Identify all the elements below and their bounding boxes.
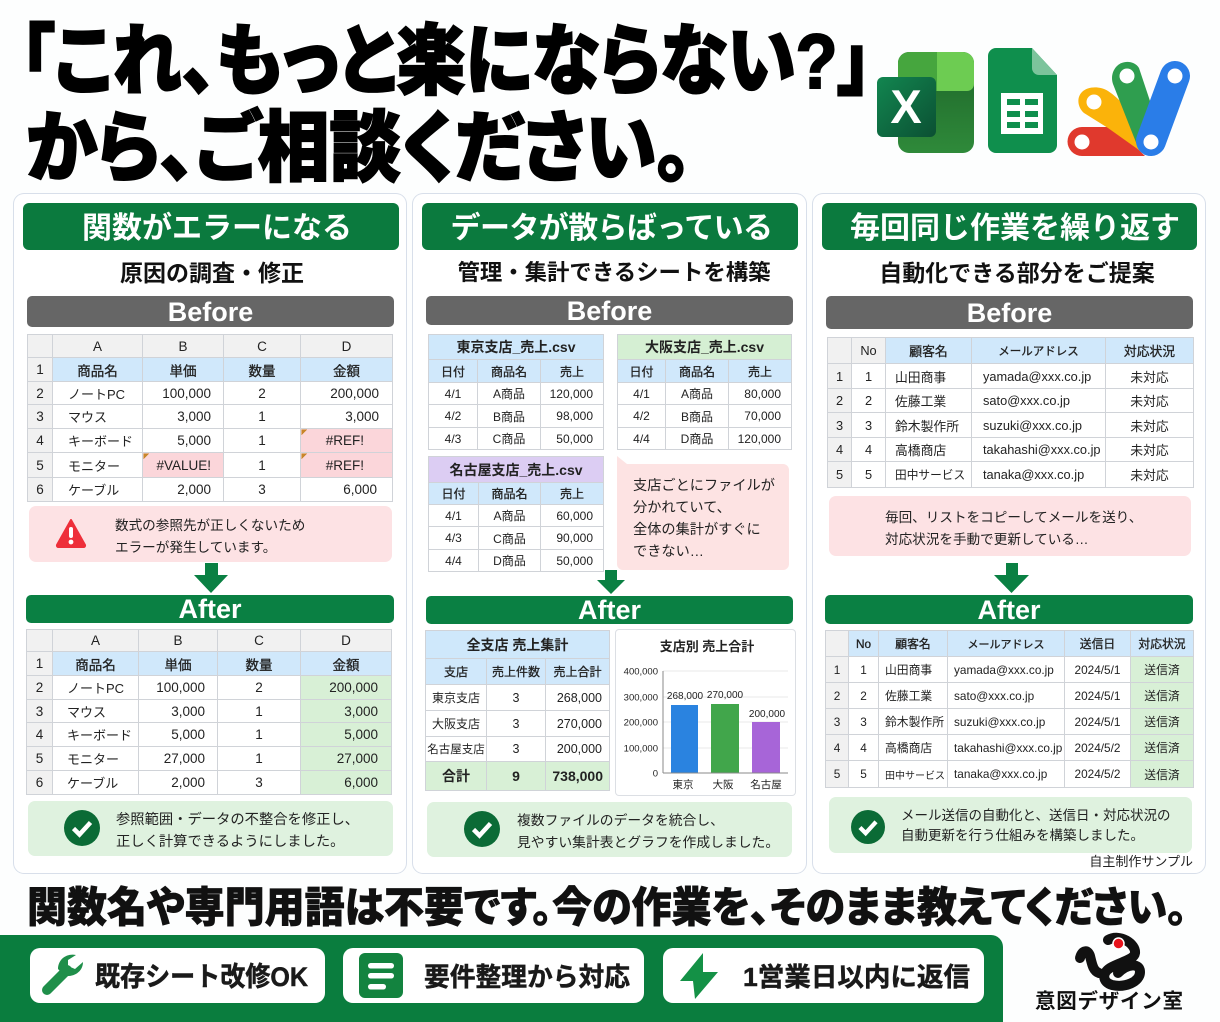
table: 名古屋支店 csv: 60,000	[556, 508, 593, 522]
before spreadsheet table: ケーブル	[68, 483, 119, 498]
after customer table: 2024/5/2	[1075, 740, 1120, 754]
result text	[517, 813, 779, 850]
table: 大阪支店 csv: 日付	[629, 364, 654, 378]
bubble text: 分かれていて、	[633, 500, 731, 516]
before label: Before	[967, 298, 1052, 328]
after spreadsheet table: B	[173, 633, 182, 648]
before customer table: 佐藤工業	[895, 394, 946, 409]
after spreadsheet table: 27,000	[337, 751, 378, 766]
icon: Excel: X	[890, 80, 922, 133]
after spreadsheet table: 数量	[246, 658, 272, 672]
table: 名古屋支店 csv: D商品	[493, 554, 526, 568]
after spreadsheet table: 2	[255, 680, 263, 695]
after spreadsheet table: キーボード	[67, 728, 132, 743]
icon: wrench	[42, 954, 83, 995]
summary table: 売上件数	[492, 665, 540, 679]
before customer table: 鈴木製作所	[895, 418, 959, 434]
table: 名古屋支店 csv: 名古屋支店_売上.csv	[449, 462, 583, 478]
before customer table: 2	[865, 393, 872, 408]
pill: 1営業日以内に返信	[663, 948, 984, 1003]
bar chart: 支店別 売上合計: 268,000	[667, 691, 704, 702]
arrow: before to after	[597, 570, 625, 594]
summary table: 東京支店	[432, 691, 480, 705]
before spreadsheet table: 6,000	[343, 482, 377, 497]
result text: 見やすい集計表とグラフを作成しました。	[517, 835, 779, 850]
before spreadsheet table: 3,000	[345, 409, 379, 424]
table: 東京支店 csv: 4/3	[445, 432, 461, 446]
after label	[26, 595, 394, 623]
before spreadsheet table: 2,000	[177, 482, 211, 497]
icon: check mark	[464, 811, 500, 847]
summary table: 3	[513, 742, 519, 756]
bar chart: 支店別 売上合計: 東京	[672, 778, 694, 791]
before customer table: 対応状況	[1124, 344, 1175, 359]
before customer table: 未対応	[1130, 443, 1169, 458]
after customer table: 送信済	[1144, 715, 1180, 729]
table: 名古屋支店 csv	[428, 456, 604, 572]
result text: 参照範囲・データの不整合を修正し、	[116, 812, 359, 828]
before customer table: tanaka@xxx.co.jp	[983, 467, 1084, 482]
before customer table: 1	[865, 368, 872, 384]
result text: 正しく計算できるようにしました。	[116, 834, 344, 850]
bar chart: 支店別 売上合計: 0	[653, 768, 658, 780]
callout: result	[829, 797, 1192, 853]
before customer table: yamada@xxx.co.jp	[983, 368, 1091, 384]
before customer table: 4	[836, 442, 843, 457]
callout: result	[427, 802, 792, 857]
summary table	[425, 630, 610, 791]
icon: Excel	[877, 52, 974, 153]
error explanation text	[115, 518, 305, 555]
before label: Before	[567, 296, 652, 326]
after customer table: tanaka@xxx.co.jp	[954, 767, 1047, 781]
table: 東京支店 csv: 東京支店_売上.csv	[456, 339, 576, 355]
table: 大阪支店 csv: 80,000	[744, 386, 781, 400]
after customer table: sato@xxx.co.jp	[954, 688, 1034, 702]
sample note: 自主制作サンプル	[1089, 854, 1193, 869]
table: 大阪支店 csv: D商品	[681, 432, 713, 446]
summary table: 9	[512, 768, 520, 784]
after spreadsheet table: D	[341, 633, 351, 648]
after customer table: 1	[860, 662, 867, 676]
error explanation text: 数式の参照先が正しくないため	[115, 518, 305, 533]
before customer table: 未対応	[1130, 468, 1169, 483]
after customer table: 5	[860, 767, 867, 781]
summary table: 268,000	[557, 690, 602, 704]
after label: After	[178, 594, 242, 624]
after spreadsheet table: 27,000	[164, 751, 205, 766]
table: 名古屋支店 csv: 50,000	[556, 554, 593, 568]
after customer table	[825, 630, 1194, 788]
before spreadsheet table: 1	[258, 433, 266, 448]
before spreadsheet table: 金額	[333, 364, 360, 378]
before customer table	[827, 337, 1194, 488]
before spreadsheet table: 3	[36, 409, 44, 424]
panel heading	[23, 203, 399, 250]
before spreadsheet table: #REF!	[326, 433, 364, 448]
before spreadsheet table: C	[257, 338, 267, 354]
before customer table: No	[860, 343, 877, 358]
before spreadsheet table: 数量	[248, 364, 276, 378]
table: 大阪支店 csv: 商品名	[679, 364, 715, 378]
table: 東京支店 csv: 売上	[560, 364, 584, 378]
pill: 既存シート改修OK	[30, 948, 325, 1003]
bubble text: 支店ごとにファイルが	[633, 478, 775, 494]
table: 大阪支店 csv: A商品	[681, 387, 713, 401]
table: 大阪支店 csv: 4/1	[633, 386, 650, 400]
bar chart: 支店別 売上合計: 支店別 売上合計	[660, 639, 754, 654]
title	[20, 19, 872, 188]
before spreadsheet table: 4	[36, 433, 44, 448]
result text	[901, 808, 1170, 843]
table: 東京支店 csv: 50,000	[556, 432, 593, 446]
table: 大阪支店 csv: 120,000	[738, 432, 781, 446]
summary table: 合計	[442, 768, 470, 784]
before spreadsheet table: 1	[36, 362, 44, 377]
bar chart: 支店別 売上合計: 300,000	[624, 692, 658, 704]
before spreadsheet table: ノートPC	[68, 386, 125, 402]
summary table: 名古屋支店	[427, 744, 485, 756]
summary table: 200,000	[557, 742, 602, 756]
after spreadsheet table: 5,000	[171, 727, 205, 742]
before spreadsheet table: 5	[36, 458, 44, 472]
after customer table: 2024/5/1	[1075, 688, 1120, 702]
table: 東京支店 csv: 120,000	[550, 386, 593, 400]
after spreadsheet table: 単価	[164, 658, 192, 672]
after customer table: 送信済	[1144, 689, 1180, 703]
table: 東京支店 csv: 4/2	[445, 409, 461, 423]
result text	[116, 812, 359, 850]
table: 大阪支店 csv: 4/2	[633, 409, 650, 423]
after spreadsheet table: 6,000	[344, 775, 378, 790]
before spreadsheet table: キーボード	[68, 434, 133, 449]
table: 東京支店 csv: C商品	[493, 432, 525, 446]
bubble text: できない…	[633, 544, 704, 560]
after label: After	[977, 595, 1040, 625]
icon: check mark	[851, 810, 885, 844]
table: 東京支店 csv: A商品	[493, 387, 525, 401]
after spreadsheet table: 2,000	[171, 775, 205, 790]
before spreadsheet table: B	[178, 338, 188, 354]
service subtitle: 原因の調査・修正	[120, 260, 304, 286]
after customer table: 対応状況	[1138, 637, 1186, 651]
after label	[426, 596, 793, 624]
callout: error cause	[29, 506, 392, 562]
after customer table: 5	[834, 767, 840, 781]
table: 大阪支店 csv: 70,000	[744, 409, 781, 423]
pill: 要件整理から対応	[343, 948, 644, 1003]
result text: メール送信の自動化と、送信日・対応状況の	[901, 808, 1170, 823]
table: 東京支店 csv: 日付	[441, 364, 465, 378]
after spreadsheet table: 3,000	[344, 704, 378, 718]
after spreadsheet table: 4	[36, 727, 43, 742]
table: 東京支店 csv: 4/1	[445, 386, 461, 400]
table: 東京支店 csv: B商品	[493, 410, 525, 424]
before spreadsheet table: 2	[36, 386, 44, 400]
table: 名古屋支店 csv: 90,000	[556, 531, 593, 545]
after customer table: メールアドレス	[968, 638, 1044, 650]
before customer table: 高橋商店	[895, 443, 946, 458]
before spreadsheet table	[27, 334, 393, 502]
error explanation text: エラーが発生しています。	[115, 540, 276, 555]
after customer table: takahashi@xxx.co.jp	[954, 740, 1062, 754]
table: 大阪支店 csv	[617, 334, 792, 450]
after spreadsheet table: 1	[255, 751, 263, 766]
after spreadsheet table: 100,000	[156, 680, 205, 695]
before customer table: 未対応	[1130, 370, 1169, 384]
service subtitle: 自動化できる部分をご提案	[879, 260, 1155, 286]
before spreadsheet table: 3	[258, 482, 266, 497]
before customer table: 未対応	[1130, 394, 1169, 409]
after spreadsheet table: モニター	[67, 752, 119, 767]
before spreadsheet table: D	[342, 338, 351, 354]
table: 東京支店 csv: 商品名	[491, 364, 527, 378]
before spreadsheet table: #VALUE!	[156, 458, 211, 472]
before spreadsheet table: A	[93, 338, 102, 354]
before spreadsheet table: 1	[258, 409, 266, 424]
bar chart: 支店別 売上合計: 200,000	[624, 718, 658, 728]
before spreadsheet table: 商品名	[77, 364, 118, 378]
after customer table: 2024/5/1	[1075, 662, 1120, 676]
after spreadsheet table: 5	[36, 751, 43, 766]
before customer table: 4	[865, 442, 872, 457]
table: 名古屋支店 csv: 4/4	[445, 554, 462, 568]
panel heading	[422, 203, 798, 250]
panel heading: 毎回同じ作業を繰り返す	[850, 212, 1180, 245]
after spreadsheet table: 金額	[332, 658, 360, 672]
after spreadsheet table: 200,000	[329, 680, 378, 695]
after spreadsheet table: A	[91, 633, 100, 648]
bubble text: 全体の集計がすぐに	[633, 522, 761, 538]
callout: result	[28, 801, 393, 856]
manual work text: 毎回、リストをコピーしてメールを送り、	[885, 510, 1142, 525]
after spreadsheet table: マウス	[67, 704, 106, 720]
table: 東京支店 csv	[428, 334, 604, 450]
service subtitle: 管理・集計できるシートを構築	[457, 260, 771, 285]
after customer table: 3	[860, 714, 867, 728]
before customer table: suzuki@xxx.co.jp	[983, 418, 1082, 432]
after label	[825, 595, 1193, 624]
after spreadsheet table: 6	[36, 775, 43, 790]
bar chart: 支店別 売上合計: 100,000	[624, 744, 658, 754]
icon: check mark	[64, 810, 100, 846]
footer band	[0, 935, 1003, 1022]
after customer table: yamada@xxx.co.jp	[954, 662, 1054, 676]
after customer table: 送信済	[1144, 768, 1180, 782]
arrow: before to after	[994, 563, 1029, 593]
before customer table: sato@xxx.co.jp	[983, 393, 1070, 408]
after customer table: 2024/5/2	[1075, 767, 1120, 781]
panel: データが散らばっている	[413, 194, 806, 873]
after spreadsheet table: 1	[255, 704, 263, 718]
before customer table: 未対応	[1130, 418, 1169, 434]
before label	[826, 296, 1193, 329]
before spreadsheet table: #REF!	[326, 458, 364, 472]
before spreadsheet table: 1	[258, 458, 266, 472]
before label	[27, 296, 394, 327]
summary table: 3	[513, 716, 519, 730]
before customer table: 3	[865, 418, 872, 432]
bar chart: 支店別 売上合計: 200,000	[749, 709, 786, 720]
icon: warning triangle	[56, 519, 86, 548]
after spreadsheet table: 1	[255, 727, 263, 742]
after customer table: 顧客名	[895, 637, 931, 651]
after spreadsheet table: 商品名	[75, 658, 116, 672]
before label: Before	[168, 297, 253, 327]
after customer table: 1	[834, 662, 840, 676]
summary table: 270,000	[557, 716, 602, 730]
after spreadsheet table: 1	[36, 656, 43, 671]
before customer table: 顧客名	[909, 344, 948, 359]
icon: lightning bolt	[680, 953, 718, 999]
bar chart: 支店別 売上合計: 270,000	[707, 690, 744, 701]
table: 名古屋支店 csv: 4/3	[445, 531, 462, 545]
table: 東京支店 csv: 98,000	[556, 409, 593, 423]
table: 大阪支店 csv: 大阪支店_売上.csv	[645, 339, 764, 355]
table: 大阪支店 csv: 4/4	[633, 432, 650, 446]
after spreadsheet table: 2	[36, 680, 43, 695]
after spreadsheet table: 5,000	[344, 727, 378, 742]
after spreadsheet table: 3	[36, 704, 43, 718]
table: 大阪支店 csv: 売上	[748, 364, 772, 378]
table: 名古屋支店 csv: 売上	[560, 487, 584, 501]
manual work text	[885, 510, 1142, 547]
after customer table: 送信日	[1080, 637, 1115, 651]
after label: After	[578, 595, 641, 625]
before spreadsheet table: 単価	[170, 364, 196, 378]
before customer table: 5	[865, 467, 872, 482]
before spreadsheet table: 100,000	[162, 386, 211, 400]
bar chart: 支店別 売上合計: 400,000	[624, 666, 658, 678]
bar chart: 支店別 売上合計: 大阪	[712, 778, 734, 791]
after spreadsheet table	[26, 629, 392, 795]
after spreadsheet table: ケーブル	[67, 776, 118, 791]
result text: 複数ファイルのデータを統合し、	[517, 813, 724, 828]
before customer table: 田中サービス	[895, 469, 965, 482]
after customer table: 4	[860, 740, 867, 754]
table: 大阪支店 csv: B商品	[681, 410, 713, 424]
summary table: 大阪支店	[432, 717, 480, 731]
icon: document list	[359, 953, 403, 998]
summary table: 3	[513, 690, 519, 704]
before customer table: メールアドレス	[998, 346, 1079, 358]
bar chart: 支店別 売上合計: 名古屋	[750, 778, 782, 791]
before spreadsheet table: 3,000	[177, 409, 211, 424]
table: 名古屋支店 csv: A商品	[493, 509, 526, 523]
before spreadsheet table: モニター	[68, 458, 120, 474]
panel: 関数がエラーになる	[14, 194, 406, 873]
after customer table: 2024/5/1	[1075, 714, 1120, 728]
after spreadsheet table: 3	[255, 775, 263, 790]
table: 名古屋支店 csv: 商品名	[491, 487, 528, 501]
icon: Apps Script	[1068, 61, 1190, 156]
before spreadsheet table: 200,000	[330, 386, 379, 400]
before customer table: 1	[836, 368, 843, 384]
after customer table: 田中サービス	[885, 770, 945, 782]
panel heading	[822, 203, 1197, 250]
before spreadsheet table: マウス	[68, 410, 107, 425]
after customer table: 送信済	[1144, 663, 1180, 677]
after customer table: suzuki@xxx.co.jp	[954, 714, 1045, 728]
result text: 自動更新を行う仕組みを構築しました。	[901, 828, 1144, 843]
before customer table: 2	[836, 393, 843, 408]
before customer table: 5	[836, 467, 843, 482]
after customer table: 送信済	[1144, 741, 1180, 755]
summary table: 全支店 売上集計	[467, 636, 568, 652]
before spreadsheet table: 5,000	[177, 433, 211, 448]
after spreadsheet table: 3,000	[171, 704, 205, 718]
after customer table: 高橋商店	[885, 741, 932, 755]
icon: Google Sheets	[988, 48, 1057, 153]
after spreadsheet table: ノートPC	[67, 681, 124, 696]
arrow: before to after	[194, 563, 228, 593]
table: 名古屋支店 csv: 日付	[441, 487, 466, 501]
manual work text: 対応状況を手動で更新している…	[885, 532, 1088, 547]
summary table: 支店	[444, 665, 468, 679]
table: 名古屋支店 csv: C商品	[493, 532, 526, 546]
logo: 意図デザイン室	[1035, 932, 1183, 1013]
before customer table: takahashi@xxx.co.jp	[983, 442, 1101, 457]
bar chart: 支店別 売上合計	[616, 630, 795, 795]
panel heading: データが散らばっている	[451, 212, 772, 245]
summary table: 売上合計	[553, 665, 602, 679]
before customer table: 3	[836, 418, 843, 432]
before spreadsheet table: 2	[258, 386, 266, 400]
panel heading: 関数がエラーになる	[82, 212, 352, 245]
before customer table: 山田商事	[895, 370, 946, 384]
after customer table: 3	[834, 714, 840, 728]
table: 名古屋支店 csv: 4/1	[445, 508, 462, 522]
speech bubble	[617, 456, 789, 570]
logo: 意図デザイン室: 意図デザイン室	[1035, 989, 1183, 1013]
before spreadsheet table: 6	[36, 482, 44, 497]
callout: manual work	[829, 496, 1191, 556]
before label	[426, 296, 793, 325]
after customer table: 4	[834, 740, 840, 754]
after customer table: 山田商事	[885, 663, 932, 677]
after customer table: 2	[860, 688, 867, 702]
after customer table: 佐藤工業	[885, 689, 932, 703]
after customer table: 鈴木製作所	[885, 715, 944, 729]
pill text: 1営業日以内に返信	[743, 962, 970, 992]
bubble text	[633, 478, 775, 560]
summary table: 738,000	[552, 768, 603, 784]
after spreadsheet table: C	[254, 633, 264, 648]
after customer table: 2	[834, 688, 840, 702]
pill text: 要件整理から対応	[424, 962, 630, 992]
after customer table: No	[856, 636, 871, 650]
panel: 毎回同じ作業を繰り返す	[813, 194, 1205, 873]
